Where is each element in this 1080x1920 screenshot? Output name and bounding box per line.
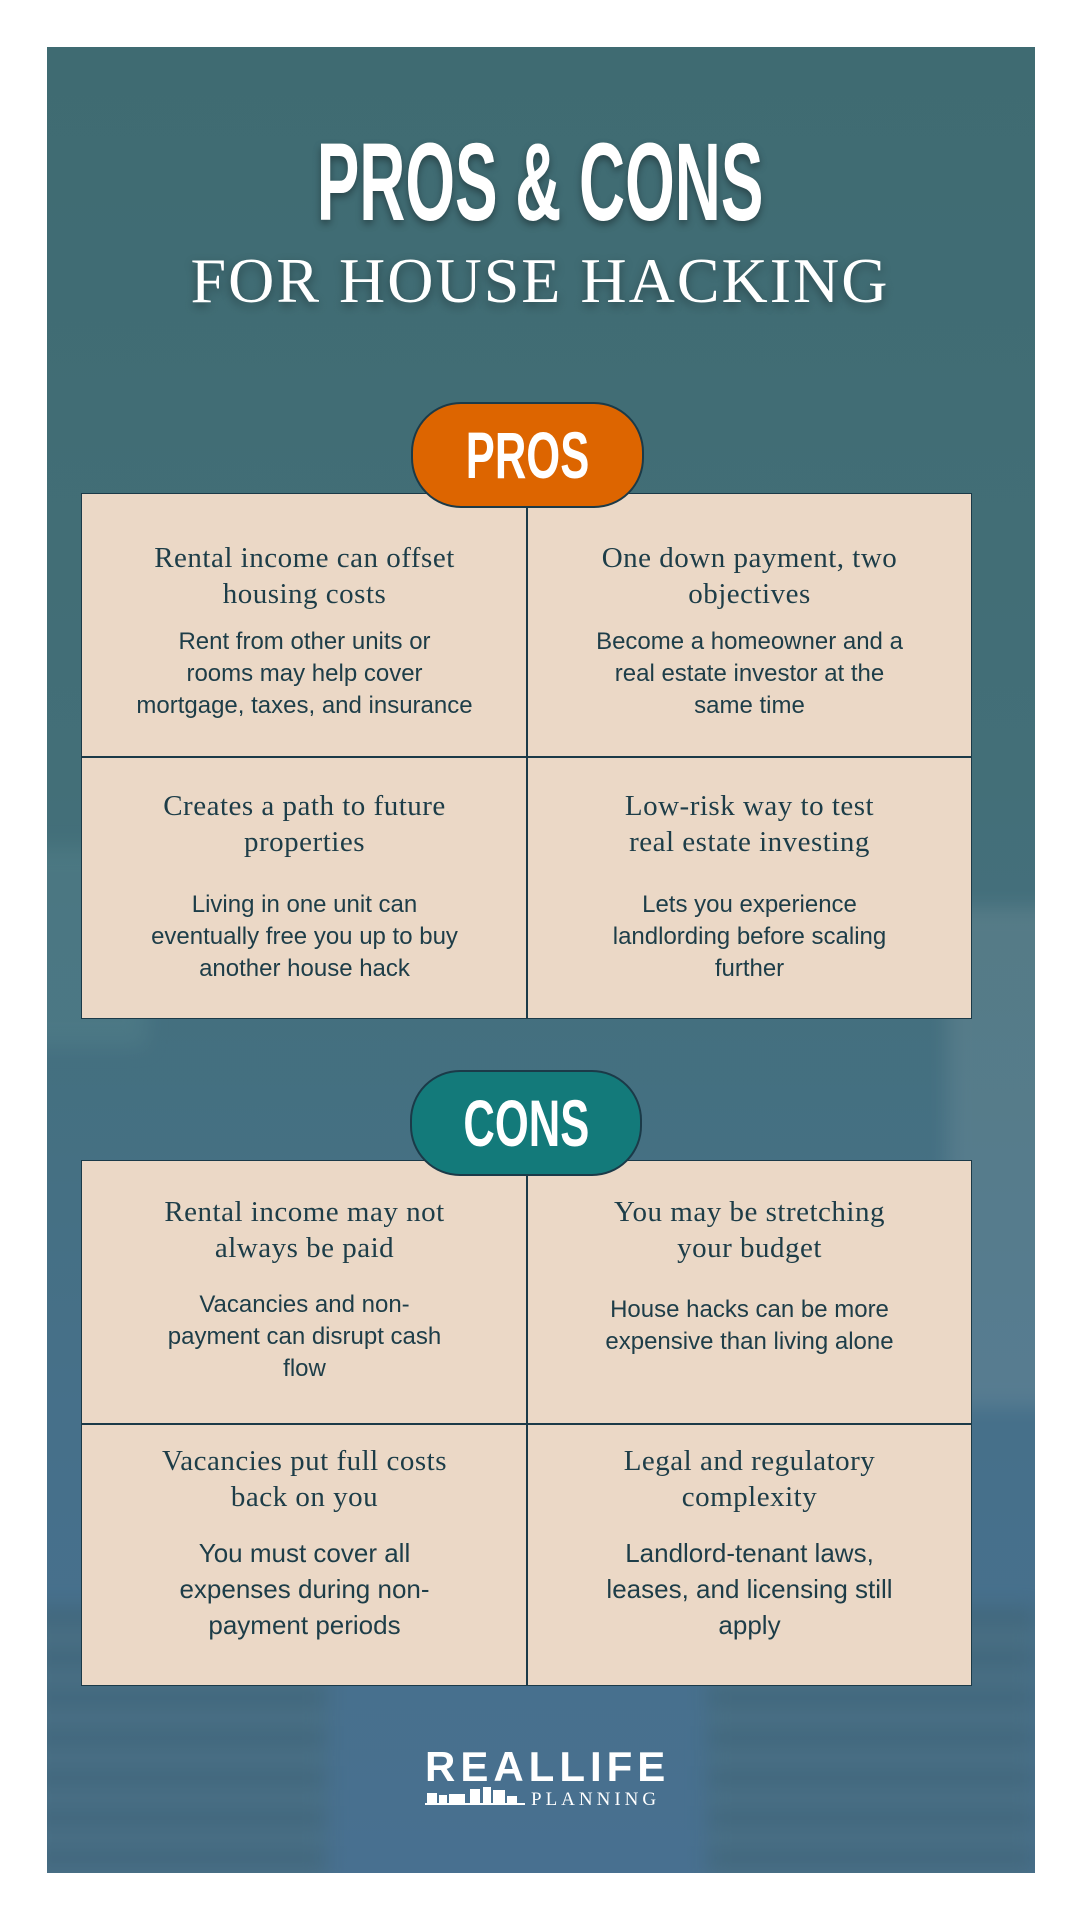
con 3: expenses during non- xyxy=(179,1574,430,1604)
con 3: back on you xyxy=(231,1481,378,1513)
con 1: payment can disrupt cash xyxy=(168,1323,441,1350)
con 2: You may be stretching xyxy=(614,1196,885,1228)
title: PROS & CONS xyxy=(317,121,763,244)
pro 2: objectives xyxy=(688,578,811,610)
pro 2 xyxy=(596,542,903,719)
con 3: payment periods xyxy=(208,1610,401,1640)
pro 4: Lets you experience xyxy=(642,891,857,918)
pro 2: Become a homeowner and a xyxy=(596,628,903,655)
pro 3: another house hack xyxy=(199,955,410,982)
con 4: Legal and regulatory xyxy=(624,1445,875,1477)
subtitle: FOR HOUSE HACKING xyxy=(191,245,889,316)
pill: cons: CONS xyxy=(463,1086,589,1160)
con 4: apply xyxy=(718,1610,781,1640)
con 4 xyxy=(606,1445,893,1640)
pro 3: properties xyxy=(244,826,365,858)
pro 1: rooms may help cover xyxy=(186,660,423,687)
con 3 xyxy=(162,1445,447,1640)
pill: cons xyxy=(410,1070,642,1176)
pro 4: real estate investing xyxy=(629,826,870,858)
con 1: Vacancies and non- xyxy=(199,1291,410,1318)
con 4: leases, and licensing still xyxy=(606,1574,893,1604)
pro 1: Rent from other units or xyxy=(178,628,431,655)
pro 1: housing costs xyxy=(223,578,386,610)
con 1 xyxy=(164,1196,445,1382)
pro 1: Rental income can offset xyxy=(154,542,455,574)
con 2: expensive than living alone xyxy=(605,1328,894,1355)
panel: cons grid xyxy=(81,1160,972,1686)
pill: pros xyxy=(411,402,644,508)
con 3: Vacancies put full costs xyxy=(162,1445,447,1477)
pro 1: mortgage, taxes, and insurance xyxy=(136,692,473,719)
con 3: You must cover all xyxy=(199,1538,410,1568)
con 1: always be paid xyxy=(215,1232,394,1264)
con 2: House hacks can be more xyxy=(610,1296,889,1323)
panel: pros grid xyxy=(81,493,972,1019)
con 4: Landlord-tenant laws, xyxy=(625,1538,874,1568)
con 4: complexity xyxy=(682,1481,817,1513)
pill: pros: PROS xyxy=(466,418,589,492)
con 1: Rental income may not xyxy=(164,1196,445,1228)
pro 2: One down payment, two xyxy=(602,542,897,574)
pro 3 xyxy=(151,790,458,982)
pro 3: Creates a path to future xyxy=(163,790,446,822)
pro 4: further xyxy=(715,955,784,982)
pro 1 xyxy=(136,542,473,719)
pro 2: same time xyxy=(694,692,805,719)
pro 3: eventually free you up to buy xyxy=(151,923,458,950)
con 2: your budget xyxy=(677,1232,822,1264)
pro 2: real estate investor at the xyxy=(615,660,884,687)
con 2 xyxy=(605,1196,894,1355)
pro 4: landlording before scaling xyxy=(613,923,886,950)
con 1: flow xyxy=(283,1355,326,1382)
logo: REALLIFE xyxy=(425,1743,670,1790)
pro 3: Living in one unit can xyxy=(192,891,417,918)
pro 4: Low-risk way to test xyxy=(625,790,874,822)
pro 4 xyxy=(613,790,886,982)
